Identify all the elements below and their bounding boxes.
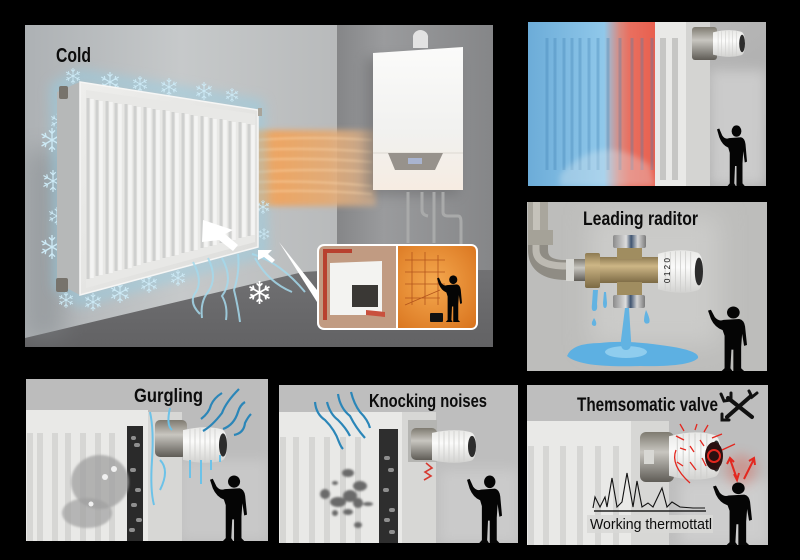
line chart	[593, 473, 706, 511]
radiator fins: white section	[663, 38, 675, 180]
pipe elbow	[528, 202, 586, 281]
icon: crossed wrench and screwdriver	[721, 391, 757, 420]
red leak marks	[424, 463, 432, 480]
silhouette: technician	[717, 125, 747, 186]
valve	[640, 432, 674, 482]
cold air flow lines	[193, 254, 305, 322]
inset: technician with wiring diagram	[398, 246, 476, 328]
silhouette: technician	[467, 475, 502, 543]
water leak	[567, 290, 698, 366]
silhouette: technician	[708, 306, 747, 371]
arrow: small white airflow arrow	[258, 250, 275, 263]
panel: thermostatic valve	[527, 385, 768, 545]
callout pointer	[279, 242, 317, 302]
icon: knocking sound waves	[315, 392, 370, 449]
panel: uneven heat radiator	[528, 22, 766, 186]
icon: snowflake	[249, 281, 270, 304]
heading: Knocking noises: Knocking noises	[369, 391, 487, 411]
boiler	[366, 30, 463, 245]
panel: leaking radiator valve	[527, 202, 767, 371]
panel: gurgling	[26, 379, 268, 541]
arrow: large white airflow arrow	[202, 220, 238, 251]
air pocket ghost	[62, 455, 129, 528]
frost speckle	[560, 150, 655, 186]
chart label: Working thermottatl	[590, 516, 712, 533]
thermostatic knob	[658, 250, 703, 293]
valve and knob	[408, 420, 476, 463]
inset: open boiler	[319, 246, 396, 328]
heading: Themsomatic valve: Themsomatic valve	[577, 395, 718, 416]
heading: Cold: Cold	[56, 45, 91, 67]
panel: cold radiator and boiler	[25, 25, 493, 347]
frost halo around radiator	[42, 68, 269, 311]
red glow and arrows	[726, 455, 756, 485]
icon: gurgling sound waves	[201, 389, 251, 435]
silhouette: technician	[210, 475, 247, 541]
brass valve body	[585, 235, 660, 308]
silhouette: technician	[713, 482, 752, 545]
thermostatic valve	[692, 27, 745, 60]
dark sludge spots	[320, 469, 373, 528]
radiator	[527, 421, 669, 545]
heading: Gurgling: Gurgling	[134, 386, 203, 407]
radiator	[56, 82, 262, 295]
heat waves from boiler to radiator	[254, 130, 376, 206]
thermostatic knob: 0120	[663, 257, 672, 283]
radiator fins	[547, 38, 652, 170]
heading: Leading raditor: Leading raditor	[583, 209, 698, 230]
inset: boiler and technician	[317, 244, 478, 330]
overheating thermostat knob	[669, 424, 735, 483]
valve and knob	[155, 420, 227, 463]
water drips	[150, 408, 220, 505]
radiator	[26, 410, 182, 541]
radiator	[279, 412, 436, 543]
panel: knocking noises	[279, 385, 518, 543]
